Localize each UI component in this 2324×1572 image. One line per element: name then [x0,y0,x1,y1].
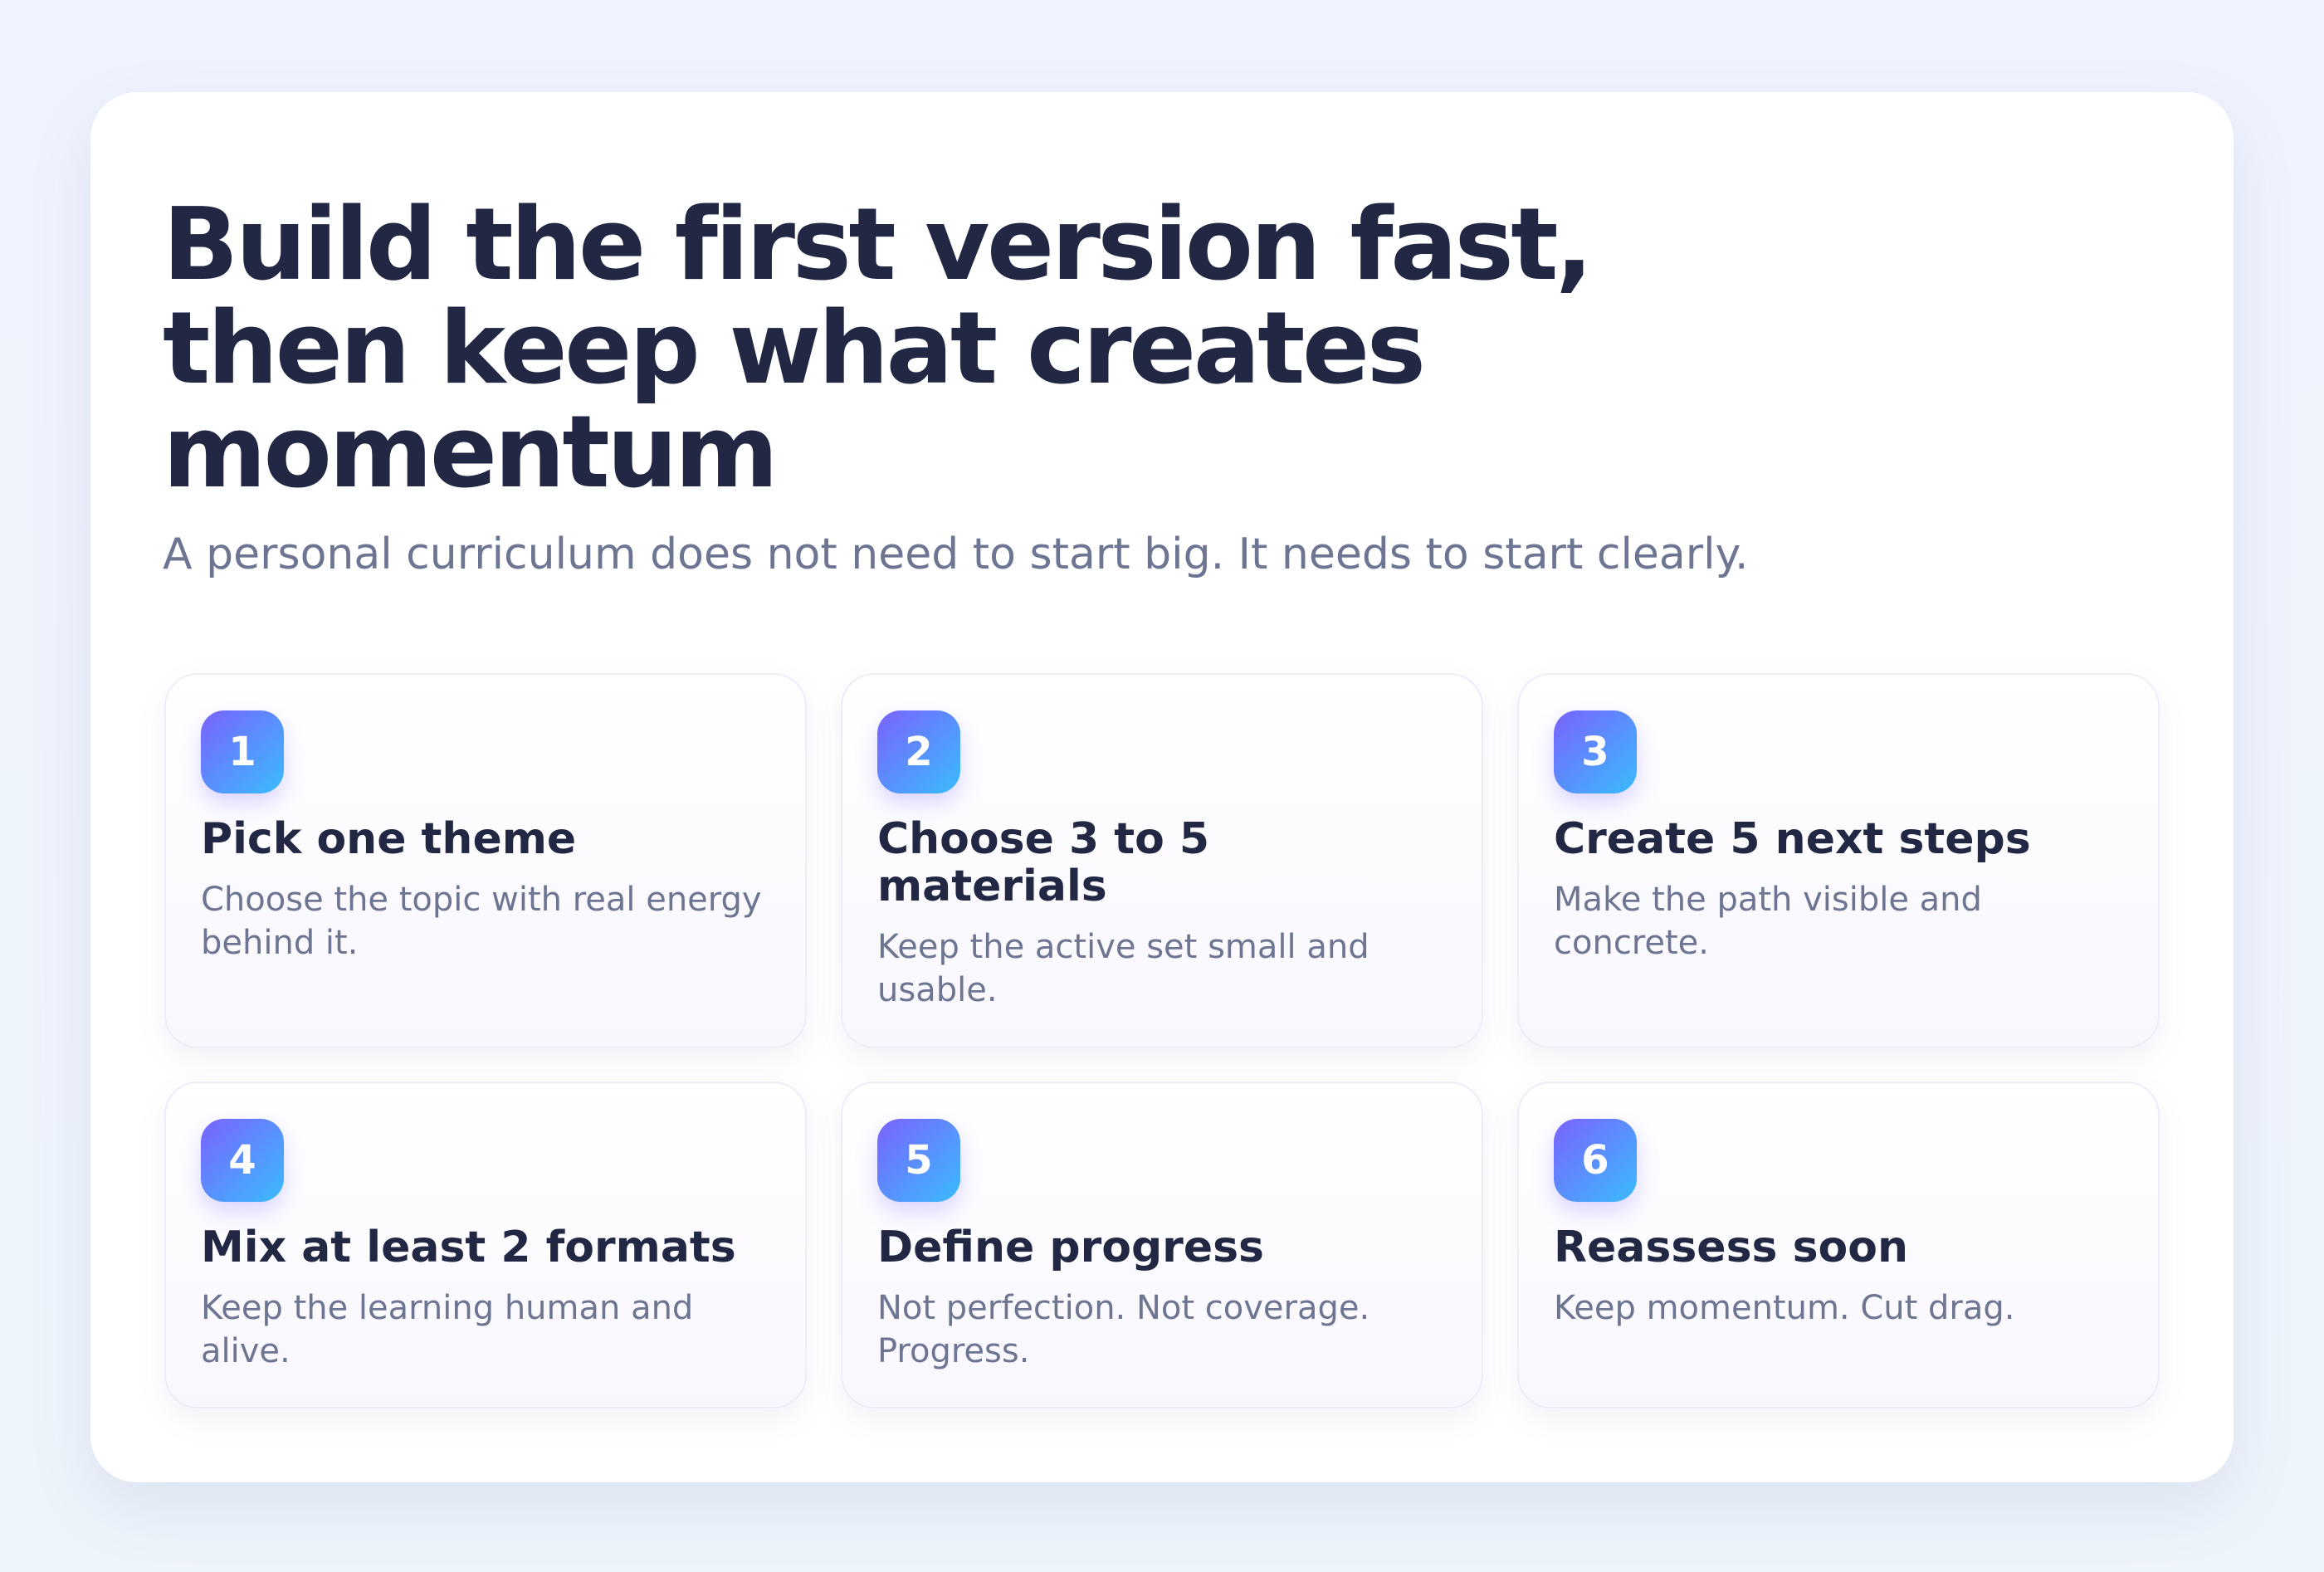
badge 4: 4 [228,1137,256,1184]
card desc 3: concrete. [1554,924,1709,962]
card title 3: Create 5 next steps [1554,814,2031,864]
badge 5: 5 [905,1137,933,1184]
card desc 5: Not perfection. Not coverage. [877,1289,1370,1327]
badge 3 [1554,710,1637,793]
card desc 5: Progress. [877,1332,1029,1370]
card title 2 [877,814,1209,911]
badge 6 [1554,1119,1637,1202]
card title 4: Mix at least 2 formats [201,1223,736,1272]
card desc 3: Make the path visible and [1554,881,1982,919]
card: step 3 [1517,673,2160,1048]
badge 3: 3 [1581,729,1609,775]
badge 5 [877,1119,960,1202]
card: step 4 [164,1081,807,1408]
badge 2 [877,710,960,793]
card: step 6 [1517,1081,2160,1408]
card desc 4: Keep the learning human and [201,1289,693,1327]
title: Build the first version fast, [163,188,1590,303]
card desc 6: Keep momentum. Cut drag. [1554,1289,2015,1327]
card: step 5 [841,1081,1483,1408]
card title 6: Reassess soon [1554,1223,1908,1272]
title: then keep what creates [163,291,1423,407]
title [163,188,1590,510]
card title 2: Choose 3 to 5 [877,814,1209,864]
card desc 5 [877,1289,1370,1370]
card title 5: Define progress [877,1223,1264,1272]
badge 4 [201,1119,284,1202]
badge 2: 2 [905,729,933,775]
badge 1 [201,710,284,793]
card desc 1: Choose the topic with real energy behind it. [201,881,762,962]
card desc 2: Keep the active set small and usable. [877,928,1370,1009]
card title 2: materials [877,862,1107,911]
title: momentum [163,395,775,510]
card desc 4: alive. [201,1332,290,1370]
card desc 3 [1554,881,1982,962]
subtitle: A personal curriculum does not need to start big. It needs to start clearly. [163,530,1748,579]
card: step 1 [164,673,807,1048]
card title 1: Pick one theme [201,814,576,864]
badge 1: 1 [228,729,256,775]
badge 6: 6 [1581,1137,1609,1184]
card: step 2 [841,673,1483,1048]
card desc 4 [201,1289,693,1370]
